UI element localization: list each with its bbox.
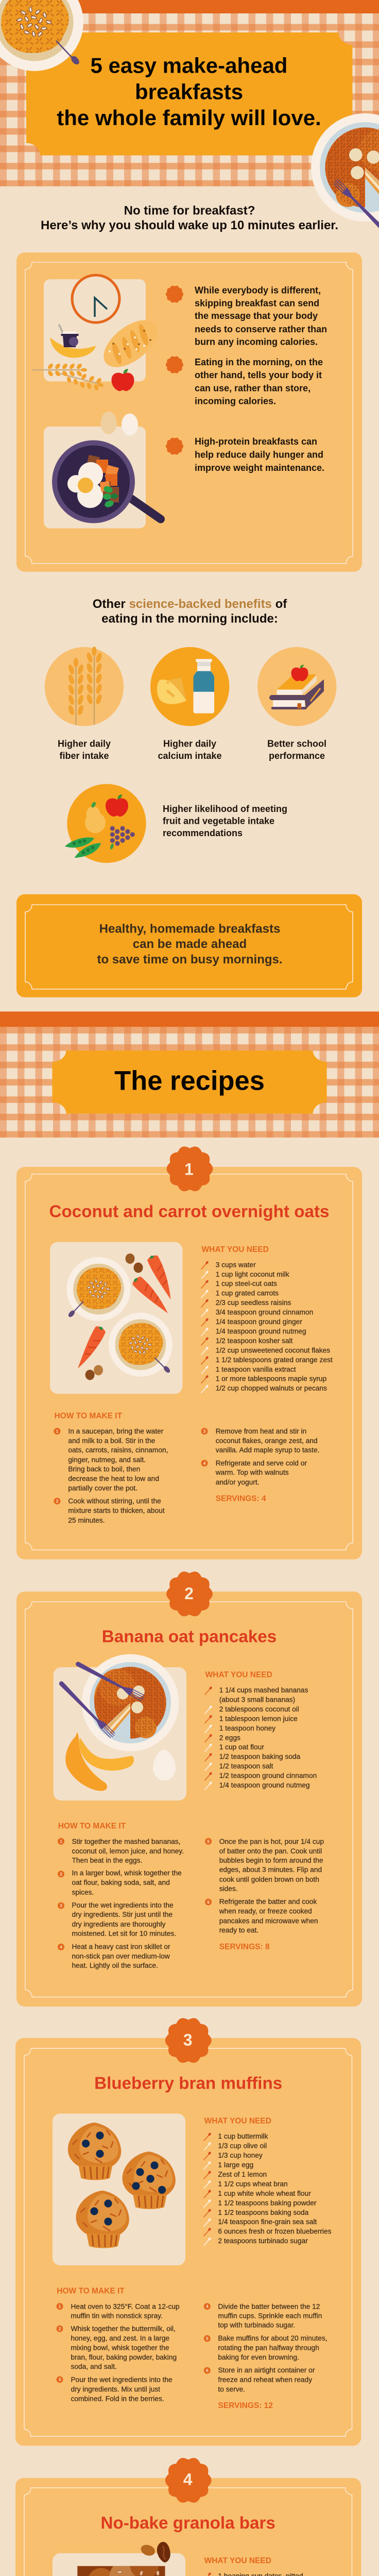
recipe 2 number — [166, 1571, 213, 1616]
recipe 1 method: 4 — [203, 1461, 206, 1466]
recipe 2 ingredients: 1 tablespoon lemon juice — [219, 1715, 298, 1722]
bullet text: High-protein breakfasts can — [195, 436, 317, 447]
recipe 3 method: 2 — [59, 2326, 61, 2331]
recipe 2 number: 2 — [184, 1584, 194, 1603]
recipe 2 method: Pour the wet ingredients into the — [72, 1902, 174, 1909]
recipe 1 ingredients: 1 cup grated carrots — [216, 1290, 279, 1297]
recipe 2 ingredients: 1/2 teaspoon ground cinnamon — [219, 1772, 317, 1780]
recipe 1 method: decrease the heat to low and — [68, 1475, 159, 1483]
bullet text: improve weight maintenance. — [195, 463, 324, 473]
benefit: calcium: calcium intake — [158, 751, 222, 761]
recipe 1 method: In a saucepan, bring the water — [68, 1428, 164, 1435]
recipe 2 ingredients — [205, 1670, 317, 1790]
recipe 2 method: SERVINGS: 8 — [219, 1943, 270, 1952]
recipe 3 ingredients: 1 1/2 teaspoons baking powder — [218, 2199, 317, 2207]
top orange bar — [0, 0, 379, 13]
recipe 4 illustration — [17, 2542, 187, 2576]
recipe 2 method: oat flour, baking soda, salt, and — [72, 1879, 170, 1887]
recipe 1 ingredients: 1/2 cup chopped walnuts or pecans — [216, 1384, 327, 1392]
recipe 1 method: mixture starts to thicken, about — [68, 1506, 165, 1515]
bullet text: help reduce daily hunger and — [195, 449, 323, 460]
recipe 1 ingredients — [201, 1245, 333, 1393]
recipe 1 method: 3 — [203, 1429, 206, 1434]
section band: the recipes: The recipes — [114, 1066, 265, 1096]
recipe 1 ingredients: 1/4 teaspoon ground ginger — [216, 1318, 302, 1326]
recipe 3 method: 1 — [59, 2304, 61, 2309]
recipe 3 method: 6 — [206, 2368, 209, 2373]
recipe 3 ingredients: 1 1/2 cups wheat bran — [218, 2180, 288, 2188]
recipe 2 method: Refrigerate the batter and cook — [219, 1898, 317, 1906]
recipe 3 method: mixing bowl, whisk together the — [71, 2344, 169, 2352]
recipe 2 method: 1 — [60, 1839, 62, 1844]
recipe 3 ingredients — [204, 2117, 332, 2245]
recipe 3 method: freeze and reheat when ready — [218, 2376, 312, 2383]
recipe 3 method: honey, egg, and zest. In a large — [71, 2334, 169, 2342]
recipe 1 method: oats, carrots, raisins, cinnamon, — [68, 1446, 168, 1454]
recipe 2 panel — [16, 1591, 362, 2007]
recipe 2 method: 3 — [60, 1903, 62, 1908]
recipe 2 ingredients: 1 cup oat flour — [219, 1743, 264, 1751]
recipe 2 method: Once the pan is hot, pour 1/4 cup — [219, 1838, 324, 1845]
recipe 2 method: 5 — [207, 1839, 210, 1844]
recipe 1 method: Cook without stirring, until the — [68, 1497, 161, 1505]
recipe 2 method: dry ingredients are thoroughly — [72, 1920, 166, 1928]
recipe 1 method: 25 minutes. — [68, 1516, 105, 1524]
bullet text: the message that your body — [195, 311, 318, 321]
recipe 3 method: muffin cups. Sprinkle each muffin — [218, 2312, 322, 2320]
recipe 1 illustration — [50, 1242, 182, 1394]
recipe 3 method: to serve. — [218, 2385, 245, 2393]
recipe 1 method: coconut flakes, orange zest, and — [216, 1437, 318, 1445]
recipe 4 panel — [15, 2478, 361, 2576]
title: 5 easy make-ahead — [91, 54, 287, 78]
recipe 1 ingredients: 1/2 cup unsweetened coconut flakes — [216, 1346, 330, 1354]
benefits heading: Other science-backed benefits of — [93, 597, 287, 611]
recipe 3 method: Whisk together the buttermilk, oil, — [71, 2325, 176, 2333]
recipe 3 method: bran, flour, baking powder, baking — [71, 2353, 177, 2361]
recipe 2 method: Stir together the mashed bananas, — [72, 1838, 180, 1845]
recipe 3 ingredients: 1 large egg — [218, 2161, 253, 2168]
recipe 2 method: sides. — [219, 1885, 238, 1892]
recipe 2 method — [58, 1822, 324, 1970]
recipe 2 method: 4 — [60, 1944, 62, 1950]
recipe 1 method: HOW TO MAKE IT — [55, 1412, 123, 1420]
recipe 2 ingredients: 1 1/4 cups mashed bananas — [219, 1686, 308, 1694]
illustration: frying pan with egg — [44, 412, 161, 529]
recipe 1 method: vanilla. Add maple syrup to taste. — [216, 1446, 319, 1454]
callout: make ahead: can be made ahead — [133, 937, 247, 951]
recipe 1 method: and/or yogurt. — [216, 1478, 260, 1486]
recipe 1 ingredients: 1 cup light coconut milk — [216, 1270, 289, 1278]
benefit: fiber: Higher daily — [58, 739, 111, 749]
recipe 1 panel — [16, 1167, 362, 1560]
benefit: fruit text: fruit and vegetable intake — [163, 816, 274, 826]
recipe 3 method: soda, and salt. — [71, 2363, 117, 2370]
recipe 2 method: when ready, or freeze cooked — [219, 1907, 312, 1915]
benefit: school — [257, 647, 336, 761]
recipe 1 title: Coconut and carrot overnight oats — [49, 1202, 329, 1222]
recipe 1 number: 1 — [184, 1160, 194, 1178]
recipe 2 method: 6 — [207, 1900, 210, 1905]
recipe 3 ingredients: WHAT YOU NEED — [204, 2117, 271, 2126]
recipe 2 ingredients: 2 eggs — [219, 1734, 240, 1741]
benefit: school: performance — [269, 751, 325, 761]
recipe 1 ingredients: 3 cups water — [216, 1261, 256, 1268]
recipe 1 ingredients: 1 1/2 tablespoons grated orange zest — [216, 1356, 333, 1364]
recipe 3 method: rotating the pan halfway through — [218, 2344, 319, 2352]
illustration: clock and breakfast foods — [32, 275, 166, 391]
bullet text: While everybody is different, — [195, 285, 321, 296]
recipe 3 ingredients: 1/3 cup olive oil — [218, 2142, 267, 2149]
benefit: calcium: Higher daily — [163, 739, 216, 749]
recipe 1 method: Remove from heat and stir in — [216, 1428, 306, 1435]
recipe 2 method: pancakes and microwave when — [219, 1917, 318, 1925]
bullet badges — [166, 286, 183, 454]
recipe 3 ingredients: 2 teaspoons turbinado sugar — [218, 2237, 308, 2245]
recipe 2 method: moistened. Let sit for 10 minutes. — [72, 1930, 176, 1938]
callout: make ahead: Healthy, homemade breakfasts — [99, 922, 280, 936]
bullet text: burn any incoming calories. — [195, 337, 318, 347]
recipe 1 method: Refrigerate and serve cold or — [216, 1459, 307, 1467]
recipe 2 method: coconut oil, lemon juice, and honey. — [72, 1847, 184, 1855]
recipe 3 method: top with turbinado sugar. — [218, 2321, 295, 2329]
recipe 2 ingredients: 1/4 teaspoon ground nutmeg — [219, 1782, 310, 1789]
bullet text: can use, rather than store, — [195, 383, 311, 394]
recipe 3 illustration — [53, 2113, 185, 2265]
recipe 2 method: HOW TO MAKE IT — [58, 1822, 126, 1831]
recipe 3 ingredients: 1/4 teaspoon fine-grain sea salt — [218, 2218, 317, 2226]
recipe 3 method: 3 — [59, 2377, 61, 2382]
illustration: pancake plate with fork — [311, 113, 379, 238]
illustration: oat bowl with spoon — [0, 0, 83, 71]
recipe 3 method: HOW TO MAKE IT — [57, 2286, 125, 2295]
benefit: school: Better school — [267, 739, 326, 749]
gingham tablecloth band — [0, 13, 379, 187]
recipe 3 method: muffin tin with nonstick spray. — [71, 2312, 163, 2320]
recipe 4 title: No-bake granola bars — [101, 2514, 275, 2533]
recipe 1 ingredients: 3/4 teaspoon ground cinnamon — [216, 1309, 313, 1316]
callout: make ahead: to save time on busy mornings. — [97, 953, 283, 967]
recipe 4 number — [165, 2458, 212, 2503]
recipe 1 method: partially cover the pot. — [68, 1484, 137, 1492]
recipe 1 ingredients: 1/2 teaspoon kosher salt — [216, 1337, 293, 1345]
recipe 2 ingredients: 1/2 teaspoon baking soda — [219, 1753, 301, 1760]
recipe 2 method: dry ingredients. Stir just until the — [72, 1911, 173, 1919]
bullet text: Eating in the morning, on the — [195, 357, 323, 367]
bullet text: incoming calories. — [195, 396, 276, 406]
recipe 3 method: baking for even browning. — [218, 2353, 299, 2361]
recipe 1 ingredients: 2/3 cup seedless raisins — [216, 1299, 291, 1307]
bullet text: skipping breakfast can send — [195, 298, 319, 308]
recipe 3 method: SERVINGS: 12 — [218, 2401, 273, 2410]
recipe 3 ingredients: 6 ounces fresh or frozen blueberries — [218, 2228, 332, 2235]
recipe 1 ingredients: WHAT YOU NEED — [202, 1245, 269, 1254]
recipe 2 method: spices. — [72, 1888, 94, 1896]
benefits heading: eating in the morning include: — [101, 612, 278, 625]
recipe 2 method: Then beat in the eggs. — [72, 1856, 142, 1864]
recipe 3 method: combined. Fold in the berries. — [71, 2395, 164, 2402]
recipe 2 method: heat. Lightly oil the surface. — [72, 1962, 158, 1970]
recipe 4 number: 4 — [183, 2470, 193, 2489]
benefit: fiber: fiber intake — [59, 751, 109, 761]
recipe 1 method: and milk to a boil. Stir in the — [68, 1437, 156, 1445]
recipe 3 method: Store in an airtight container or — [218, 2366, 315, 2374]
section band: the recipes — [0, 1011, 379, 1138]
recipe 2 method: bubbles begin to form around the — [219, 1856, 323, 1864]
recipe 2 ingredients: WHAT YOU NEED — [205, 1670, 272, 1679]
title: the whole family will love. — [57, 106, 321, 130]
recipe 4 ingredients: WHAT YOU NEED — [204, 2556, 271, 2565]
recipe 2 ingredients: (about 3 small bananas) — [219, 1696, 295, 1703]
recipe 2 method: ready to eat. — [219, 1926, 259, 1934]
recipe 3 method: Pour the wet ingredients into the — [71, 2376, 173, 2383]
benefit: fruit and vegetables — [65, 784, 146, 863]
benefit: fiber — [45, 647, 124, 761]
panel: why wake up earlier — [16, 252, 362, 572]
recipe 3 number — [165, 2018, 212, 2063]
recipe 3 method: dry ingredients. Mix until just — [71, 2385, 160, 2393]
recipe 3 method: Bake muffins for about 20 minutes, — [218, 2334, 328, 2342]
recipe 3 method — [57, 2286, 328, 2410]
recipe 2 ingredients: 2 tablespoons coconut oil — [219, 1705, 299, 1713]
recipe 3 number: 3 — [183, 2030, 193, 2049]
recipe 3 ingredients: Zest of 1 lemon — [218, 2171, 267, 2178]
benefit: fruit text: recommendations — [163, 828, 243, 838]
recipe 2 ingredients: 1 teaspoon honey — [219, 1724, 275, 1732]
recipe 2 method: cook until golden brown on both — [219, 1875, 319, 1883]
recipe 3 ingredients: 1 cup white whole wheat flour — [218, 2190, 311, 2197]
callout: make ahead — [16, 894, 362, 997]
recipe 1 method: 2 — [56, 1499, 59, 1504]
recipe 3 ingredients: 1/3 cup honey — [218, 2151, 263, 2159]
recipe 3 title: Blueberry bran muffins — [94, 2074, 282, 2093]
recipe 3 method: 4 — [206, 2304, 209, 2309]
recipe 1 ingredients: 1 cup steel-cut oats — [216, 1280, 277, 1287]
title: breakfasts — [135, 79, 243, 104]
recipe 2 method: Heat a heavy cast iron skillet or — [72, 1943, 170, 1951]
bullet text: needs to conserve rather than — [195, 324, 327, 334]
recipe 3 method: Divide the batter between the 12 — [218, 2302, 320, 2310]
recipe 1 ingredients: 1 or more tablespoons maple syrup — [216, 1375, 327, 1383]
recipe 3 panel — [15, 2038, 361, 2446]
recipe 2 method: of batter onto the pan. Cook until — [219, 1847, 322, 1855]
recipe 2 illustration — [54, 1654, 186, 1801]
intro heading: Here’s why you should wake up 10 minutes earlier. — [41, 218, 338, 232]
benefit: calcium — [150, 647, 229, 761]
recipe 2 method: non-stick pan over medium-low — [72, 1952, 170, 1960]
recipe 2 method: edges, about 3 minutes. Flip and — [219, 1866, 322, 1874]
recipe 1 method: ginger, nutmeg, and salt. — [68, 1456, 146, 1464]
recipe 1 method: SERVINGS: 4 — [216, 1495, 266, 1503]
title panel — [26, 32, 352, 156]
recipe 2 method: 2 — [60, 1871, 62, 1876]
recipe 3 method: 5 — [206, 2336, 209, 2341]
recipe 3 method: Heat oven to 325°F. Coat a 12-cup — [71, 2302, 180, 2310]
recipe 3 ingredients: 1 cup buttermilk — [218, 2132, 268, 2140]
benefit: fruit text: Higher likelihood of meeting — [163, 804, 287, 814]
recipe 1 method: warm. Top with walnuts — [215, 1469, 289, 1477]
intro heading: No time for breakfast? — [124, 204, 255, 217]
recipe 1 method: Bring back to boil, then — [68, 1465, 140, 1473]
recipe 2 method: In a larger bowl, whisk together the — [72, 1869, 182, 1877]
recipe 1 method: 1 — [56, 1429, 59, 1434]
recipe 1 method — [54, 1412, 319, 1524]
recipe 1 ingredients: 1/4 teaspoon ground nutmeg — [216, 1327, 306, 1335]
recipe 2 ingredients: 1/2 teaspoon salt — [219, 1762, 273, 1770]
recipe 1 number — [167, 1146, 213, 1191]
recipe 1 ingredients: 1 teaspoon vanilla extract — [216, 1365, 296, 1373]
bullet text: other hand, tells your body it — [195, 370, 322, 380]
recipe 4 ingredients — [204, 2556, 322, 2576]
recipe 3 ingredients: 1 1/2 teaspoons baking soda — [218, 2209, 309, 2216]
recipe 2 title: Banana oat pancakes — [102, 1627, 277, 1647]
